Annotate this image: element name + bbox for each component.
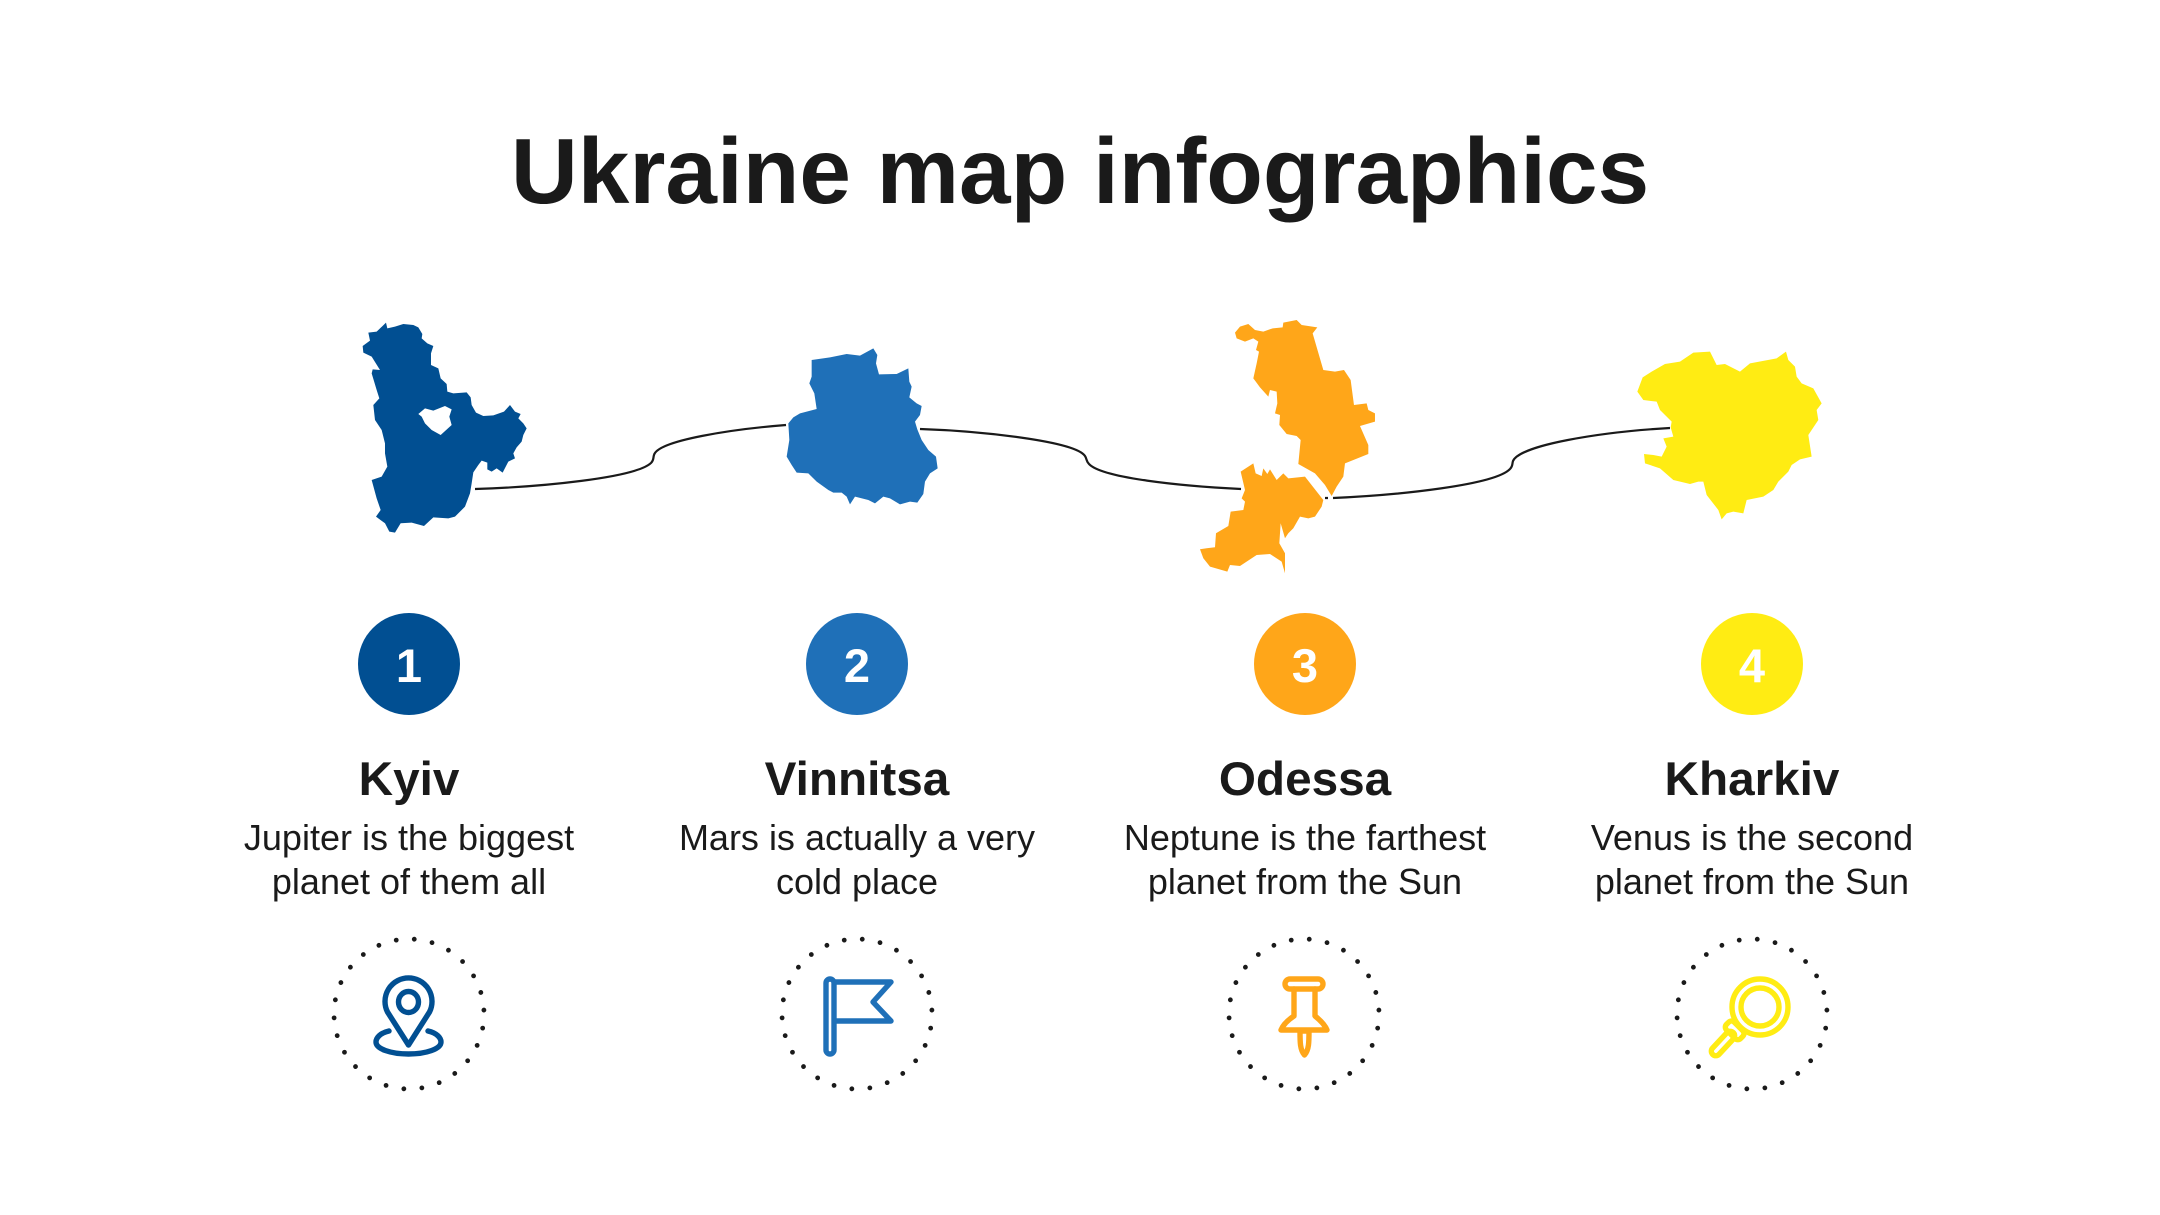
heading: Kharkiv: Kharkiv xyxy=(1665,753,1840,806)
dotted ring xyxy=(1225,935,1383,1093)
icon: push pin xyxy=(1281,979,1327,1055)
number badge 1 xyxy=(358,613,460,715)
description: Odessa: planet from the Sun xyxy=(1148,861,1462,902)
icon: map pin xyxy=(376,978,441,1054)
connector: Vinnitsa to Odessa xyxy=(920,429,1241,489)
connector: Odessa to Kharkiv xyxy=(1325,428,1670,498)
number badge 3: 3 xyxy=(1292,639,1318,692)
description: Kharkiv: Venus is the second xyxy=(1591,817,1913,858)
description: Kyiv xyxy=(244,817,574,902)
number badge 2 xyxy=(806,613,908,715)
map: Vinnitsa region xyxy=(787,348,938,504)
number badge 4: 4 xyxy=(1739,639,1765,692)
number badge 4 xyxy=(1701,613,1803,715)
description: Kyiv: planet of them all xyxy=(272,861,546,902)
description: Kyiv: Jupiter is the biggest xyxy=(244,817,574,858)
column: Kyiv xyxy=(244,613,574,1093)
dotted ring xyxy=(778,935,936,1093)
description: Vinnitsa xyxy=(679,817,1035,902)
title: Ukraine map infographics xyxy=(511,119,1649,223)
connector: Kyiv to Vinnitsa xyxy=(475,425,786,489)
description: Odessa: Neptune is the farthest xyxy=(1124,817,1486,858)
icon: magnifying glass xyxy=(1709,979,1788,1058)
heading: Odessa: Odessa xyxy=(1219,753,1392,806)
description: Vinnitsa: Mars is actually a very xyxy=(679,817,1035,858)
number badge 2: 2 xyxy=(844,639,870,692)
description: Vinnitsa: cold place xyxy=(776,861,938,902)
heading: Vinnitsa: Vinnitsa xyxy=(765,753,950,806)
dotted ring xyxy=(1673,935,1831,1093)
column: Odessa xyxy=(1124,613,1486,1093)
description: Odessa xyxy=(1124,817,1486,902)
description: Kharkiv xyxy=(1591,817,1913,902)
dotted ring xyxy=(330,935,488,1093)
icon: flag xyxy=(826,979,891,1054)
number badge 1: 1 xyxy=(396,639,422,692)
map: Kharkiv region xyxy=(1637,352,1822,519)
column: Vinnitsa xyxy=(679,613,1035,1093)
description: Kharkiv: planet from the Sun xyxy=(1595,861,1909,902)
map: Kyiv region xyxy=(363,323,527,533)
heading: Kyiv: Kyiv xyxy=(359,753,460,806)
number badge 3 xyxy=(1254,613,1356,715)
map: Odessa region xyxy=(1200,320,1375,573)
column: Kharkiv xyxy=(1591,613,1913,1093)
